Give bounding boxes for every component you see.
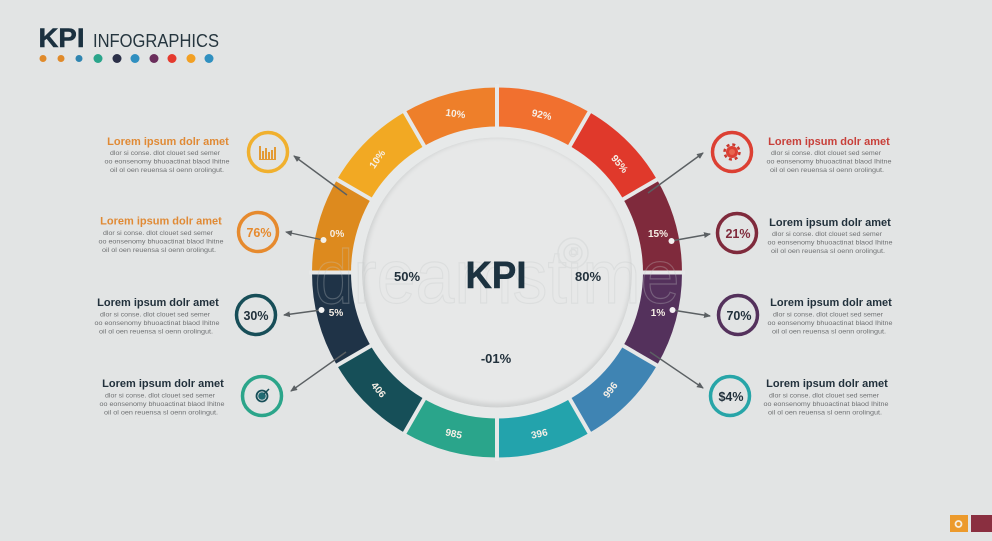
segment: 10% orange xyxy=(404,88,497,147)
centre text: 50% xyxy=(394,269,420,284)
icon: $4% ring xyxy=(710,376,750,416)
panel: left item 1: oo eonsenomy bhuoactinat blaod Ihitne xyxy=(104,158,230,166)
panel: right item 4: oo eonsenomy bhuoactinat blaod Ihitne xyxy=(764,401,889,408)
segment: 10% amber xyxy=(337,112,424,200)
icon: gear xyxy=(712,132,752,172)
panel: right item 4: oil ol oen reuensa sl oenn orolingut. xyxy=(768,410,882,416)
icon: 70% ring: 70% xyxy=(726,309,752,323)
icon: 21% ring xyxy=(718,214,756,252)
segment: 92% xyxy=(497,88,590,147)
segment labels: 396 xyxy=(530,427,549,442)
panel: left item 2: Lorem ipsum dolr amet xyxy=(100,216,222,228)
panel: right item 3: oil ol oen reuensa sl oenn orolingut. xyxy=(772,328,886,336)
segment: 15% xyxy=(623,180,682,272)
inner band xyxy=(351,126,643,418)
panel: left item 4 xyxy=(100,376,282,416)
segment labels: 406 xyxy=(368,380,388,401)
segment labels: 985 xyxy=(444,427,463,442)
arrows xyxy=(284,153,710,391)
watermark: dreamstime xyxy=(314,235,680,320)
centre text: KPI xyxy=(466,255,526,297)
panel: right item 1: Lorem ipsum dolr amet xyxy=(768,136,890,148)
panel: left item 4: oil ol oen reuensa sl oenn orolingut. xyxy=(104,410,218,416)
panel: right item 1 xyxy=(712,132,892,174)
panel: left item 3: dlor si conse. dlot clouet sed semer xyxy=(100,312,211,318)
panel: right item 3: dlor si conse. dlot clouet sed semer xyxy=(773,312,884,318)
panel: left item 1: dlor si conse. dlot clouet sed semer xyxy=(110,150,221,157)
panel: right item 3 xyxy=(718,296,893,336)
segment labels: 10% xyxy=(368,148,388,171)
panel: right item 1: oil ol oen reuensa sl oenn orolingut. xyxy=(770,167,884,174)
segment labels: 996 xyxy=(602,380,621,400)
panel: right item 3: oo eonsenomy bhuoactinat blaod Ihitne xyxy=(768,320,893,327)
panel: right item 4: Lorem ipsum dolr amet xyxy=(766,378,888,390)
panel: left item 1: oil ol oen reuensa sl oenn orolingut. xyxy=(110,167,224,174)
segment: 406 xyxy=(337,345,424,433)
heading: KPI: KPI xyxy=(38,23,84,53)
panel: left item 3: oo eonsenomy bhuoactinat blaod Ihitne xyxy=(94,320,220,327)
icon: 76% ring: 76% xyxy=(246,226,272,240)
panel: left item 3: Lorem ipsum dolr amet xyxy=(97,297,219,309)
panel: left item 4: dlor si conse. dlot clouet sed semer xyxy=(105,392,216,400)
ring chart xyxy=(309,84,685,461)
panel: right item 1: oo eonsenomy bhuoactinat blaod Ihitne xyxy=(766,158,892,166)
segment labels xyxy=(329,108,668,442)
panel: right item 1: dlor si conse. dlot clouet sed semer xyxy=(771,150,882,157)
segment labels: 92% xyxy=(531,108,553,123)
colour dots xyxy=(40,54,214,63)
panel: right item 2 xyxy=(718,214,893,255)
panel: left item 2: oo eonsenomy bhuoactinat blaod Ihitne xyxy=(98,238,224,246)
segment labels: 1% xyxy=(651,308,665,319)
icon: $4% ring: $4% xyxy=(718,390,744,404)
centre text xyxy=(394,255,601,366)
panel: right item 3: Lorem ipsum dolr amet xyxy=(770,297,892,309)
segment: 996 xyxy=(570,345,657,433)
segment labels: 15% xyxy=(648,229,668,240)
icon: 70% ring xyxy=(718,296,758,334)
segment labels: 95% xyxy=(608,153,630,176)
panel: left item 3: oil ol oen reuensa sl oenn orolingut. xyxy=(99,328,213,336)
panel: right item 4 xyxy=(710,376,889,416)
icon: 21% ring: 21% xyxy=(725,227,751,241)
segment: 5% xyxy=(312,272,371,365)
segment: 0% xyxy=(312,180,371,272)
icon: bar chart xyxy=(248,132,288,172)
panel: left item 2: oil ol oen reuensa sl oenn orolingut. xyxy=(102,247,216,254)
segment: 1% xyxy=(623,272,682,365)
panel: left item 3 xyxy=(94,296,276,336)
panel: left item 2 xyxy=(98,212,278,254)
centre text: -01% xyxy=(481,351,512,366)
segment: 95% xyxy=(570,112,657,200)
segment: 396 xyxy=(497,398,590,458)
icon: 30% ring: 30% xyxy=(243,309,269,323)
heading: INFOGRAPHICS: INFOGRAPHICS xyxy=(93,31,219,51)
icon: 76% ring xyxy=(238,212,278,252)
panel: left item 4: oo eonsenomy bhuoactinat blaod Ihitne xyxy=(100,401,225,408)
panel: right item 4: dlor si conse. dlot clouet sed semer xyxy=(769,392,880,400)
icon: 30% ring xyxy=(236,296,276,334)
segment: 985 xyxy=(404,398,497,458)
segment labels: 10% xyxy=(445,108,466,121)
segment labels: 5% xyxy=(329,308,343,319)
footer badge xyxy=(950,515,992,532)
title block xyxy=(38,23,219,63)
panel: left item 1 xyxy=(104,132,288,174)
panel: left item 1: Lorem ipsum dolr amet xyxy=(107,136,229,148)
icon: target xyxy=(242,376,282,416)
panel: left item 4: Lorem ipsum dolr amet xyxy=(102,378,224,390)
panel: right item 2: oo eonsenomy bhuoactinat blaod Ihitne xyxy=(768,240,893,246)
segment labels: 0% xyxy=(330,229,344,240)
panel: right item 2: oil ol oen reuensa sl oenn orolingut. xyxy=(771,248,885,255)
panel: right item 2: Lorem ipsum dolr amet xyxy=(769,217,891,229)
panel: left item 2: dlor si conse. dlot clouet sed semer xyxy=(103,230,214,237)
inner circle xyxy=(362,138,632,408)
centre text: 80% xyxy=(575,269,601,284)
panel: right item 2: dlor si conse. dlot clouet sed semer xyxy=(772,231,883,238)
